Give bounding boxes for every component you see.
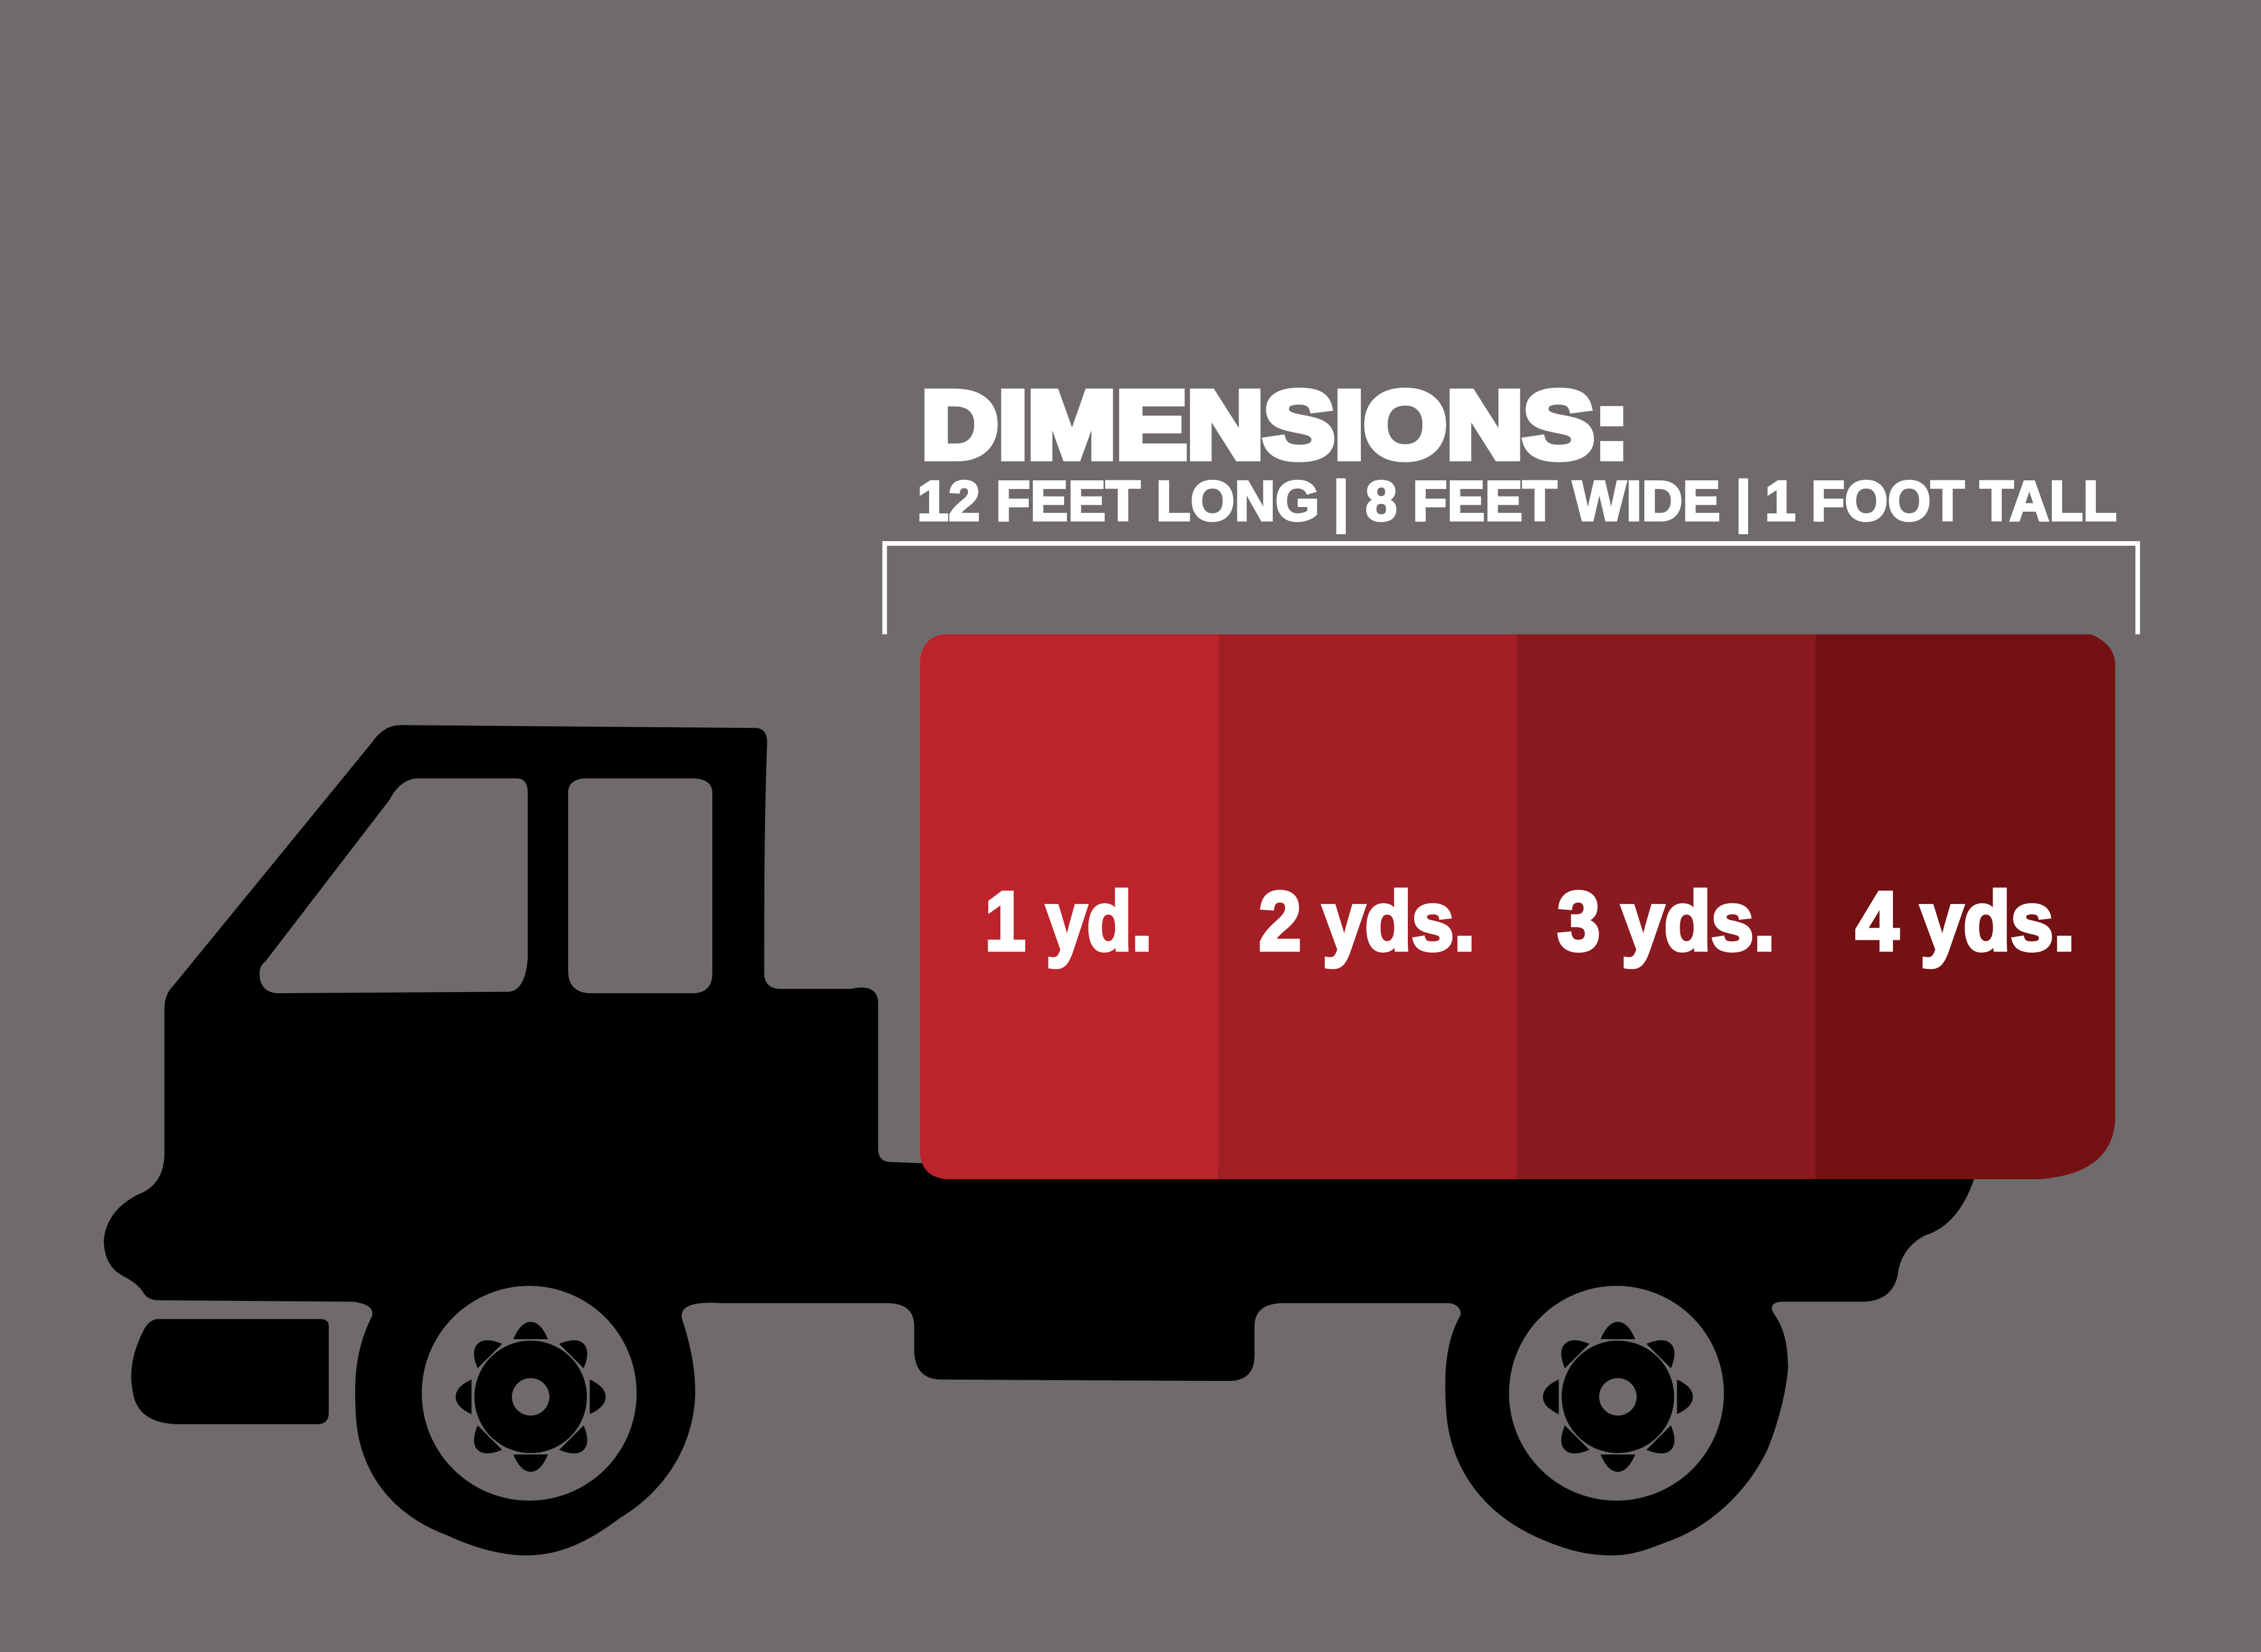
- subtitle: |: [1735, 469, 1751, 533]
- label: 3 yds.: 3 yds.: [1557, 874, 1775, 968]
- bracket: [884, 544, 2138, 634]
- label: 1 yd.: 1 yd.: [985, 874, 1152, 968]
- truck body silhouette: [104, 725, 1974, 1555]
- truck bed segments: [920, 634, 2116, 1179]
- rear wheel: [1509, 1286, 1724, 1501]
- subtitle: 8 FEET WIDE: [1366, 469, 1720, 533]
- truck: [104, 725, 1974, 1555]
- front bumper: [131, 1319, 329, 1424]
- subtitle: |: [1333, 469, 1349, 533]
- segment: 3 yards: [1517, 634, 1815, 1179]
- segment: 1 yard: [920, 634, 1218, 1179]
- subtitle: 1 FOOT TALL: [1765, 469, 2117, 533]
- label: 4 yds.: 4 yds.: [1856, 874, 2075, 968]
- segment: 2 yards: [1218, 634, 1517, 1179]
- subtitle: [917, 469, 2117, 533]
- title: DIMENSIONS:: [922, 371, 1629, 478]
- label: 2 yds.: 2 yds.: [1259, 874, 1475, 968]
- segment: 4 yards: [1815, 634, 2116, 1179]
- front wheel: [422, 1286, 636, 1501]
- subtitle: 12 FEET LONG: [917, 469, 1319, 533]
